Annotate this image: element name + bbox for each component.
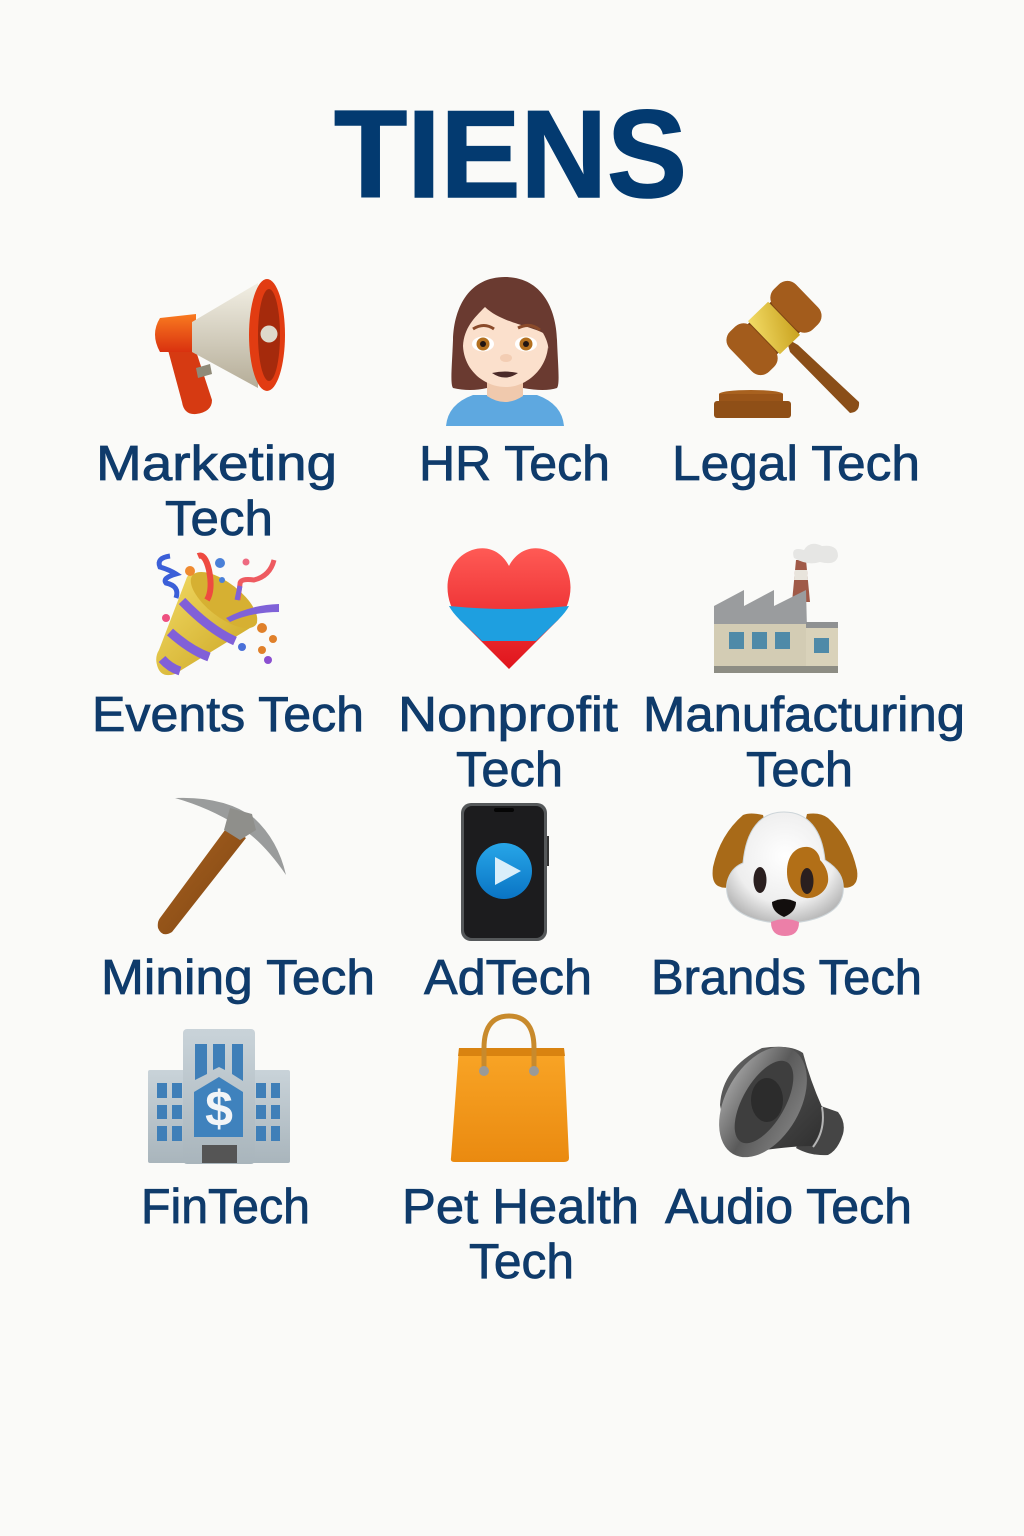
item: HR Tech	[419, 277, 610, 491]
item: FinTech	[141, 1029, 310, 1234]
label line 2: Tech	[469, 1235, 574, 1289]
icon: megaphone	[155, 279, 285, 414]
icon: smartphone with play button	[461, 803, 549, 941]
item: AdTech	[424, 803, 592, 1005]
icon: heart	[448, 548, 570, 669]
item: Marketing Tech	[96, 279, 337, 546]
label: Events Tech	[92, 688, 364, 742]
label: Audio Tech	[665, 1180, 912, 1234]
label line 2: Tech	[456, 743, 563, 797]
title: TIENS	[334, 86, 687, 224]
icon: speaker	[701, 1032, 844, 1172]
icon: dog face	[713, 812, 857, 936]
label: AdTech	[424, 951, 592, 1005]
icon: bank building	[148, 1029, 290, 1164]
item: Manufacturing Tech	[643, 544, 965, 797]
item: Brands Tech	[651, 812, 922, 1005]
label: Brands Tech	[651, 951, 922, 1005]
icon: factory	[714, 544, 838, 673]
label line 2: Tech	[746, 743, 853, 797]
item: Mining Tech	[101, 798, 375, 1005]
label: Pet Health	[402, 1180, 639, 1234]
label: Manufacturing	[643, 688, 965, 742]
icon: woman	[446, 277, 564, 426]
item: Legal Tech	[672, 276, 920, 491]
icon: party popper	[156, 556, 279, 675]
icon: pickaxe	[158, 798, 286, 934]
icon: gavel	[714, 276, 859, 418]
label: Legal Tech	[672, 437, 920, 491]
item: Events Tech	[92, 556, 364, 742]
item: Pet Health Tech	[402, 1016, 639, 1289]
label: Nonprofit	[398, 688, 618, 742]
item: Audio Tech	[665, 1032, 912, 1234]
label: Marketing	[96, 437, 337, 491]
label line 2: Tech	[165, 492, 273, 546]
icon: bank building: $	[205, 1081, 233, 1137]
icon: shopping bag	[451, 1016, 569, 1162]
label: FinTech	[141, 1180, 310, 1234]
label: Mining Tech	[101, 951, 375, 1005]
item: Nonprofit Tech	[398, 548, 618, 797]
label: HR Tech	[419, 437, 610, 491]
